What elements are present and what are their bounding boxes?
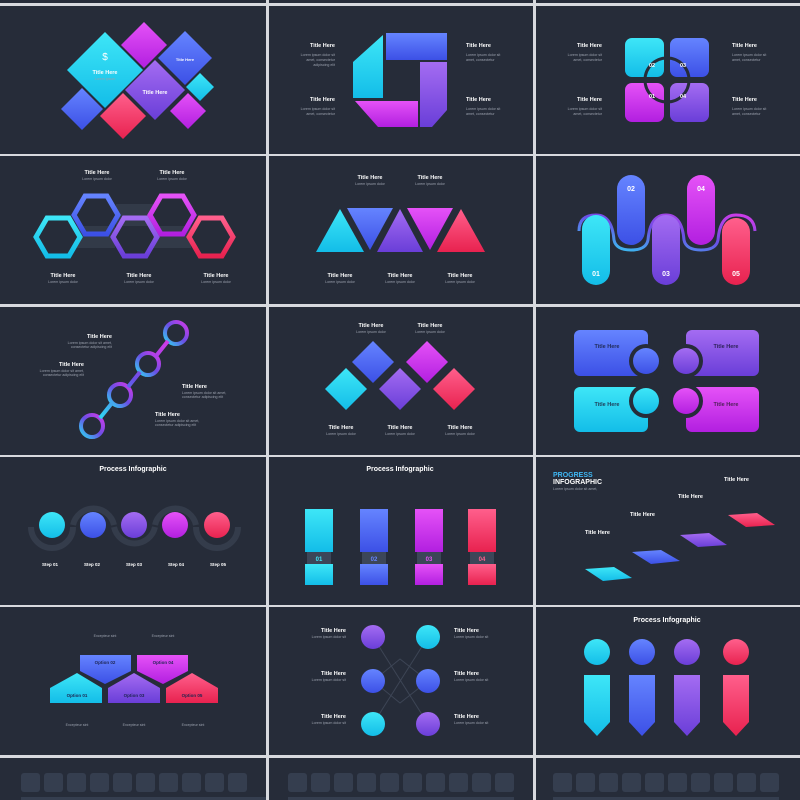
panel: process steps <box>0 457 266 605</box>
panel: spiral chain: Lorem ipsum dolor sit amet, <box>155 419 199 423</box>
panel: cross connections: Lorem ipsum dolor sit <box>454 635 488 639</box>
panel: quad circle: Title Here <box>577 43 602 49</box>
panel: octagon ring: Lorem ipsum dolor sit <box>301 107 335 111</box>
panel: spiral chain <box>0 307 266 455</box>
panel: triangles: Lorem ipsum dolor <box>385 280 416 284</box>
panel: wave pills: 03 <box>662 271 670 278</box>
panel: cross connections: Title Here <box>321 671 346 677</box>
panel: cross connections: Title Here <box>321 714 346 720</box>
panel: triangles: Lorem ipsum dolor <box>445 280 476 284</box>
panel: cards: Title Here <box>714 402 738 408</box>
panel: hexagon chain: Title Here <box>127 273 151 279</box>
panel: diamond grid: Title Here <box>448 425 472 431</box>
panel: pill arrows: Process Infographic <box>633 617 701 624</box>
panel: hexagon chain: Lorem ipsum dolor <box>48 280 79 284</box>
panel: triangles: Lorem ipsum dolor <box>415 182 446 186</box>
panel: progress plates: Title Here <box>724 477 749 483</box>
panel: process steps: Step 04 <box>168 562 184 567</box>
panel: triangles: Title Here <box>448 273 472 279</box>
panel: diamond grid: Lorem ipsum dolor <box>385 432 416 436</box>
panel: spiral chain: Title Here <box>87 334 112 340</box>
panel: wave pills: 01 <box>592 271 600 278</box>
panel: process steps: Step 02 <box>84 562 100 567</box>
panel: spiral chain: Title Here <box>182 384 207 390</box>
panel: quad circle: Lorem ipsum dolor sit <box>732 107 766 111</box>
panel: diamond mosaic <box>0 6 266 154</box>
panel: process steps: Step 03 <box>126 562 142 567</box>
panel: progress plates: Title Here <box>585 530 610 536</box>
panel: quad circle: amet, consectetur <box>573 112 603 116</box>
panel: hexagon chain <box>0 156 266 304</box>
panel: octagon ring <box>269 6 533 154</box>
panel: diamond mosaic: Title Here <box>176 57 195 62</box>
panel: triangles: Title Here <box>358 175 382 181</box>
panel: quad circle: Lorem ipsum dolor sit <box>568 107 602 111</box>
panel: options: Excepteur sint <box>66 723 88 727</box>
panel: options: Excepteur sint <box>123 723 145 727</box>
panel: progress plates: INFOGRAPHIC <box>553 479 602 486</box>
panel: diamond grid: Lorem ipsum dolor <box>445 432 476 436</box>
panel: quad circle: Title Here <box>732 43 757 49</box>
panel: quad circle: 03 <box>680 63 686 69</box>
panel: diamond grid: Lorem ipsum dolor <box>326 432 357 436</box>
panel: quad circle: Title Here <box>577 97 602 103</box>
panel: quad circle: Lorem ipsum dolor sit <box>568 53 602 57</box>
panel: cross connections <box>269 607 533 755</box>
panel: diamond mosaic: Lorem ipsum <box>95 77 115 81</box>
panel: cross connections: Title Here <box>454 714 479 720</box>
panel: octagon ring: Lorem ipsum dolor sit <box>466 53 500 57</box>
panel: wave pills: 04 <box>697 186 705 193</box>
panel: progress plates: PROGRESS <box>553 472 593 479</box>
panel: quad circle: Title Here <box>732 97 757 103</box>
panel: hexagon chain: Title Here <box>160 170 184 176</box>
panel: spiral chain: consectetur adipiscing elit <box>182 395 223 399</box>
panel: triangles: Title Here <box>388 273 412 279</box>
panel: octagon ring: amet, consectetur <box>306 58 336 62</box>
panel: options: Option 02 <box>95 660 116 665</box>
panel: options <box>0 607 266 755</box>
panel: progress plates: Title Here <box>678 494 703 500</box>
panel: quad circle: Lorem ipsum dolor sit <box>732 53 766 57</box>
panel: octagon ring: Title Here <box>466 97 491 103</box>
panel: options: Excepteur sint <box>152 634 174 638</box>
panel: triangles: Title Here <box>328 273 352 279</box>
panel: icon tiles <box>0 758 800 800</box>
panel: spiral chain: consectetur adipiscing elit <box>71 345 112 349</box>
panel: cross connections: Lorem ipsum dolor sit <box>312 635 346 639</box>
panel: cross connections: Title Here <box>321 628 346 634</box>
panel: cards: Title Here <box>714 344 738 350</box>
panel: process steps: Process Infographic <box>99 466 167 473</box>
panel: spiral chain: Lorem ipsum dolor sit amet, <box>182 391 226 395</box>
panel: octagon ring: amet, consectetur <box>306 112 336 116</box>
panel: diamond grid: Title Here <box>329 425 353 431</box>
panel: wave pills: 05 <box>732 271 740 278</box>
panel: cross connections: Title Here <box>454 628 479 634</box>
panel: cross connections: Lorem ipsum dolor sit <box>312 678 346 682</box>
panel: triangles: Title Here <box>418 175 442 181</box>
panel: process steps: Step 01 <box>42 562 58 567</box>
panel: options: Option 05 <box>182 693 203 698</box>
panel: process steps: Step 05 <box>210 562 226 567</box>
panel: diamond grid: Title Here <box>418 323 442 329</box>
panel: cross connections: Lorem ipsum dolor sit <box>454 678 488 682</box>
panel: diamond grid: Lorem ipsum dolor <box>415 330 446 334</box>
panel: spiral chain: consectetur adipiscing elit <box>155 423 196 427</box>
panel: hexagon chain: Lorem ipsum dolor <box>157 177 188 181</box>
panel: spiral chain: Lorem ipsum dolor sit amet, <box>40 369 84 373</box>
panel: options: Option 04 <box>153 660 174 665</box>
panel: options: Option 03 <box>124 693 145 698</box>
panel: progress plates: Title Here <box>630 512 655 518</box>
panel: triangles: Lorem ipsum dolor <box>355 182 386 186</box>
panel: diamond mosaic: Title Here <box>93 70 117 76</box>
panel: quad circle: amet, consectetur <box>573 58 603 62</box>
panel: progress plates: Lorem ipsum dolor sit amet, <box>553 487 597 491</box>
panel: 3d bars: Process Infographic <box>366 466 434 473</box>
panel: spiral chain: Title Here <box>155 412 180 418</box>
panel: diamond grid: Title Here <box>388 425 412 431</box>
panel: triangles: Lorem ipsum dolor <box>325 280 356 284</box>
panel: options: Excepteur sint <box>182 723 204 727</box>
panel: progress plates <box>536 457 800 605</box>
panel: triangles <box>269 156 533 304</box>
panel: 3d bars: 01 <box>316 557 323 563</box>
panel: cross connections: Lorem ipsum dolor sit <box>312 721 346 725</box>
panel strip top <box>0 0 800 3</box>
panel: diamond mosaic: Title Here <box>143 90 167 96</box>
panel: octagon ring: amet, consectetur <box>466 112 495 116</box>
panel: octagon ring: Title Here <box>310 43 335 49</box>
panel: hexagon chain: Lorem ipsum dolor <box>201 280 232 284</box>
panel: quad circle: 02 <box>649 63 655 69</box>
panel: options: Excepteur sint <box>94 634 116 638</box>
panel: cards <box>536 307 800 455</box>
panel: hexagon chain: Title Here <box>204 273 228 279</box>
panel: pill arrows <box>536 607 800 755</box>
panel: octagon ring: Title Here <box>310 97 335 103</box>
panel: quad circle: amet, consectetur <box>732 58 761 62</box>
panel: octagon ring: Lorem ipsum dolor sit <box>466 107 500 111</box>
panel: hexagon chain: Title Here <box>51 273 75 279</box>
panel: wave pills <box>536 156 800 304</box>
panel: spiral chain: Title Here <box>59 362 84 368</box>
panel: hexagon chain: Title Here <box>85 170 109 176</box>
panel: octagon ring: adipiscing elit <box>313 63 335 67</box>
panel: diamond grid <box>269 307 533 455</box>
panel: octagon ring: Title Here <box>466 43 491 49</box>
panel: quad circle <box>536 6 800 154</box>
panel: hexagon chain: Lorem ipsum dolor <box>124 280 155 284</box>
panel: options: Option 01 <box>67 693 88 698</box>
panel: diamond grid: Lorem ipsum dolor <box>356 330 387 334</box>
panel: cross connections: Title Here <box>454 671 479 677</box>
panel: cards: Title Here <box>595 344 619 350</box>
panel: diamond mosaic: $ <box>102 52 108 63</box>
panel: octagon ring: amet, consectetur <box>466 58 495 62</box>
panel: 3d bars: 03 <box>426 557 433 563</box>
panel: quad circle: 04 <box>680 94 687 100</box>
panel: cards: Title Here <box>595 402 619 408</box>
panel: spiral chain: consectetur adipiscing elit <box>43 373 84 377</box>
panel: 3d bars <box>269 457 533 605</box>
panel: hexagon chain: Lorem ipsum dolor <box>82 177 113 181</box>
panel: spiral chain: Lorem ipsum dolor sit amet, <box>68 341 112 345</box>
panel: cross connections: Lorem ipsum dolor sit <box>454 721 488 725</box>
panel: wave pills: 02 <box>627 186 635 193</box>
panel: diamond grid: Title Here <box>359 323 383 329</box>
panel: octagon ring: Lorem ipsum dolor sit <box>301 53 335 57</box>
panel: quad circle: 01 <box>649 94 655 100</box>
panel: quad circle: amet, consectetur <box>732 112 761 116</box>
panel: 3d bars: 02 <box>371 557 378 563</box>
panel: 3d bars: 04 <box>479 557 486 563</box>
